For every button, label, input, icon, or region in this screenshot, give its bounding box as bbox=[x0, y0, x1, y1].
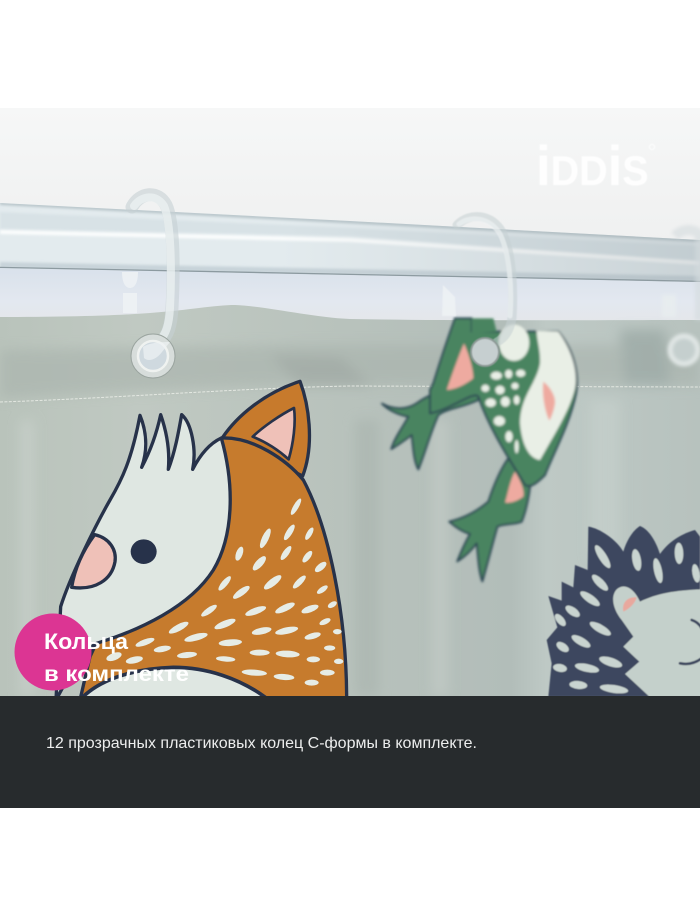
backdrop under rod bbox=[0, 268, 700, 320]
wall background bbox=[0, 108, 700, 248]
callout text: Кольца bbox=[44, 629, 129, 654]
ring 1 tab bbox=[122, 272, 138, 313]
registered mark bbox=[649, 144, 655, 150]
frog body and thigh bbox=[430, 318, 577, 486]
frog dots bbox=[481, 370, 525, 453]
fox head bbox=[56, 415, 230, 700]
fox spots bbox=[105, 497, 343, 686]
caption panel bbox=[0, 696, 700, 808]
ring 2 bbox=[442, 217, 513, 366]
ring 3 eyelet bbox=[670, 336, 698, 364]
fox eye bbox=[131, 539, 157, 564]
ring 1 eyelet bbox=[131, 334, 175, 378]
fox body bbox=[80, 438, 347, 700]
callout text: в комплекте bbox=[44, 663, 189, 686]
photo panel: curtain on rod bbox=[0, 108, 700, 702]
frog thigh pink bbox=[447, 343, 473, 390]
ring 2 tab bbox=[442, 285, 456, 316]
frog belly bbox=[520, 331, 576, 460]
ring 3 bbox=[662, 230, 700, 364]
illustration: frog bbox=[382, 318, 577, 581]
callout: pink circle badge bbox=[14, 614, 92, 690]
frog legs lower bbox=[382, 382, 530, 581]
callout text bbox=[44, 629, 189, 686]
frog mouth pink bbox=[543, 382, 555, 421]
fox ear inner bbox=[253, 408, 295, 459]
fox ear bbox=[223, 381, 309, 476]
ring 1 bbox=[122, 195, 175, 378]
fox nose bbox=[72, 535, 115, 588]
ring 2 eyelet bbox=[471, 338, 499, 366]
hedgehog ear bbox=[623, 597, 637, 612]
curtain fabric bbox=[0, 305, 700, 696]
logo: IDDIS: iDDiS bbox=[536, 135, 649, 197]
shower rod bbox=[0, 203, 700, 282]
hem seam stitching bbox=[0, 386, 700, 402]
hedgehog smile bbox=[680, 620, 700, 664]
hedgehog face bbox=[613, 587, 700, 697]
frog top band bbox=[472, 318, 497, 333]
hedgehog spines bbox=[547, 526, 700, 697]
fox chest bbox=[82, 666, 266, 696]
hedgehog spine marks bbox=[552, 543, 700, 695]
caption text: 12 прозрачных пластиковых колец С-формы в комплекте. bbox=[46, 735, 477, 752]
logo: IDDIS bbox=[540, 145, 646, 185]
illustration: fox bbox=[56, 381, 347, 702]
illustration: hedgehog bbox=[547, 526, 700, 697]
frog throat bbox=[499, 324, 529, 361]
ring 3 tab bbox=[662, 295, 676, 317]
